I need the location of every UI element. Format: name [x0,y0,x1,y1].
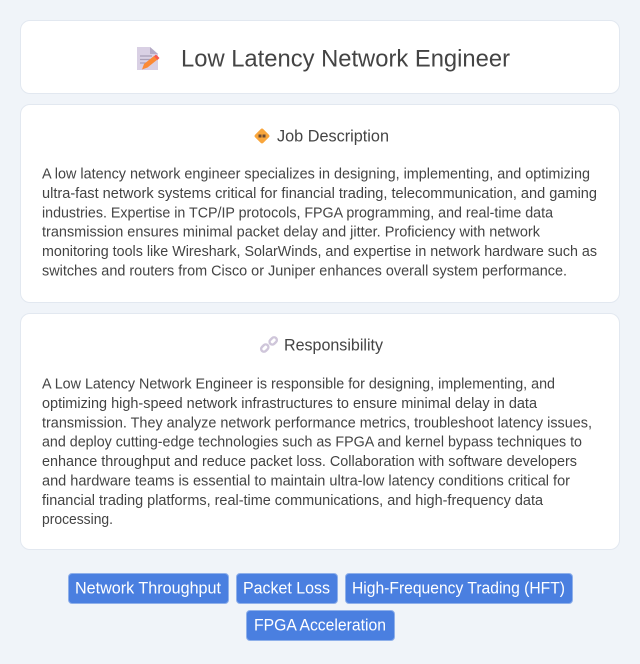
text block: job description: A low latency network engineer specializes in designing, implementing, and optimizing [42,166,590,182]
heading: responsibility: Responsibility [284,336,384,354]
panel: job description [20,104,620,303]
tag: high-frequency trading: High-Frequency Trading (HFT) [352,580,565,598]
icon: document with pencil [137,47,160,70]
tag: network throughput [68,573,229,604]
text block: responsibility: and hardware teams is essential to maintain ultra-low latency conditions critical for [42,474,570,490]
text block: responsibility: A Low Latency Network Engineer is responsible for designing, implementing, and [42,376,555,392]
tag: network throughput: Network Throughput [75,580,221,598]
text block: responsibility: enhance throughput and reduce packet loss. Collaboration with software developers [42,454,577,470]
text block: responsibility: processing. [42,512,113,528]
text block: job description: ultra-fast network systems critical for financial trading, telecommunication, and gaming [42,186,597,202]
tag: packet loss: Packet Loss [243,580,330,598]
text block: job description: switches and routers from Cisco or Juniper enhances overall system performance. [42,264,567,280]
panel: title card [20,20,620,94]
heading: job description: Job Description [277,128,389,146]
tag: fpga acceleration: FPGA Acceleration [254,616,386,634]
text block: job description: industries. Expertise in TCP/IP protocols, FPGA programming, and real-time data [42,206,553,222]
text block: responsibility [42,376,592,528]
tag: packet loss [236,573,338,604]
text block: responsibility: transmission. They analyze network performance metrics, troubleshoot latency issues, [42,416,592,432]
icon: chain link [260,336,278,353]
panel: responsibility [20,313,620,550]
title: Low Latency Network Engineer [181,46,510,72]
text block: responsibility: financial trading platforms, real-time communications, and high-frequency data [42,493,543,509]
text block: job description: transmission ensures minimal packet delay and jitter. Proficiency with network [42,224,541,240]
icon: orange diamond [254,128,270,144]
text block: job description [42,166,597,280]
text block: responsibility: and deploy cutting-edge technologies such as FPGA and kernel bypass techniques to [42,434,582,450]
tag: high-frequency trading [345,573,573,604]
tag: fpga acceleration [246,610,395,641]
text block: job description: monitoring tools like Wireshark, SolarWinds, and expertise in network hardware such as [42,244,597,260]
text block: responsibility: optimizing high-speed network infrastructures to ensure minimal delay in data [42,396,537,412]
